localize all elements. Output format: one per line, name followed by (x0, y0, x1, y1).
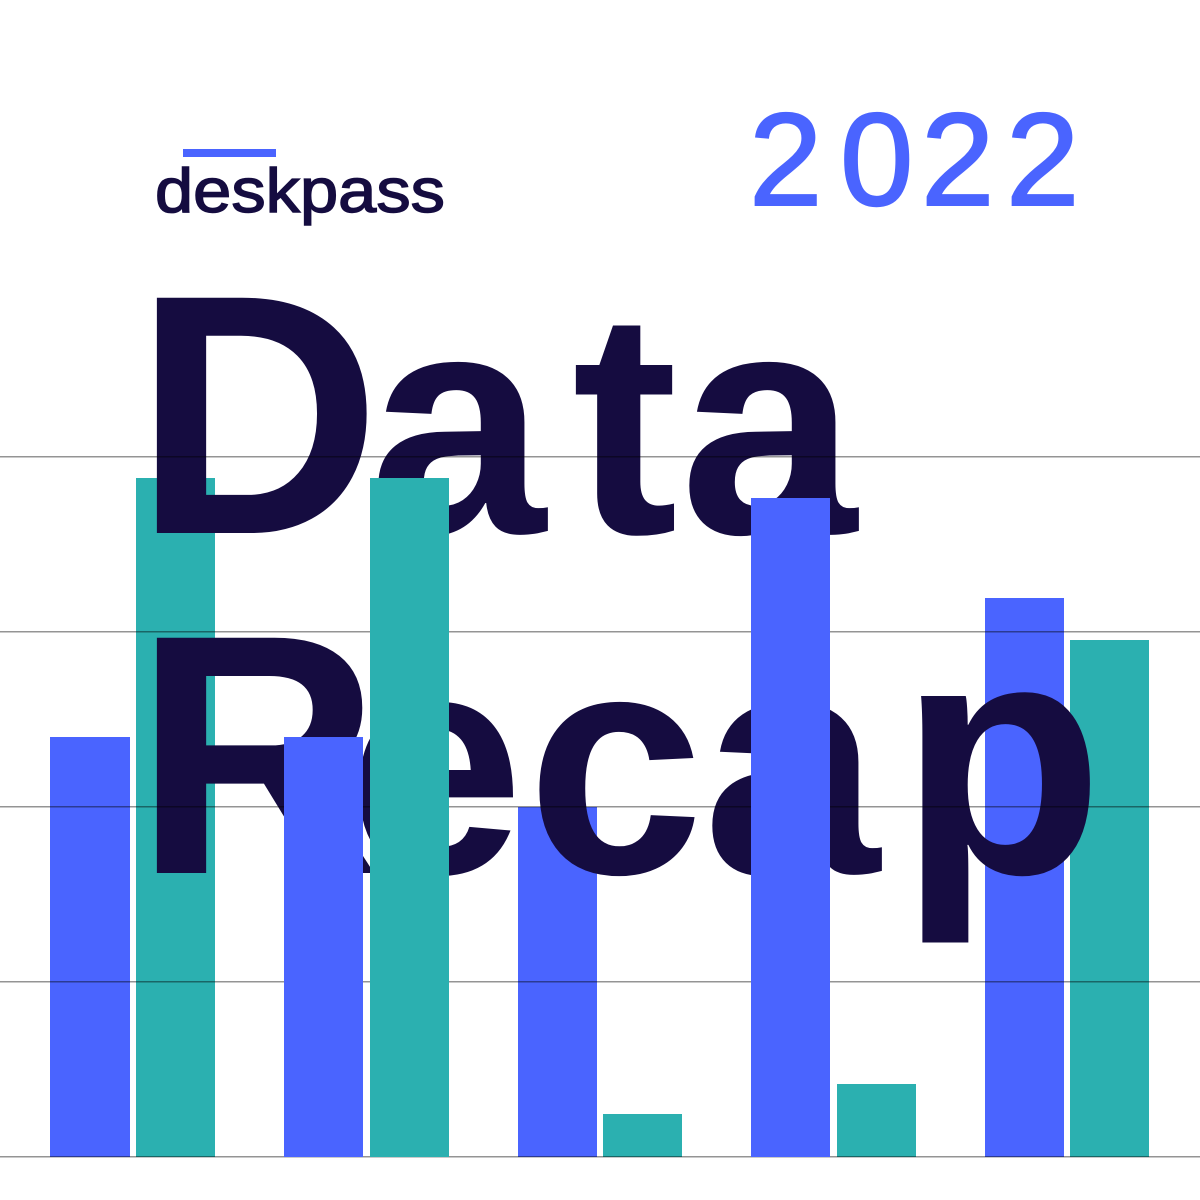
title: Data Recap: Recap (134, 564, 1104, 946)
bars behind the title (50, 478, 1149, 1157)
bars in front of the title (284, 478, 830, 1157)
year: 2022: 2022 (749, 86, 1079, 233)
logo: deskpass: deskpass (155, 157, 445, 226)
chart grid lines (0, 456, 1200, 1158)
title: Data Recap: Data (134, 224, 859, 606)
title: Data Recap (134, 224, 1104, 946)
